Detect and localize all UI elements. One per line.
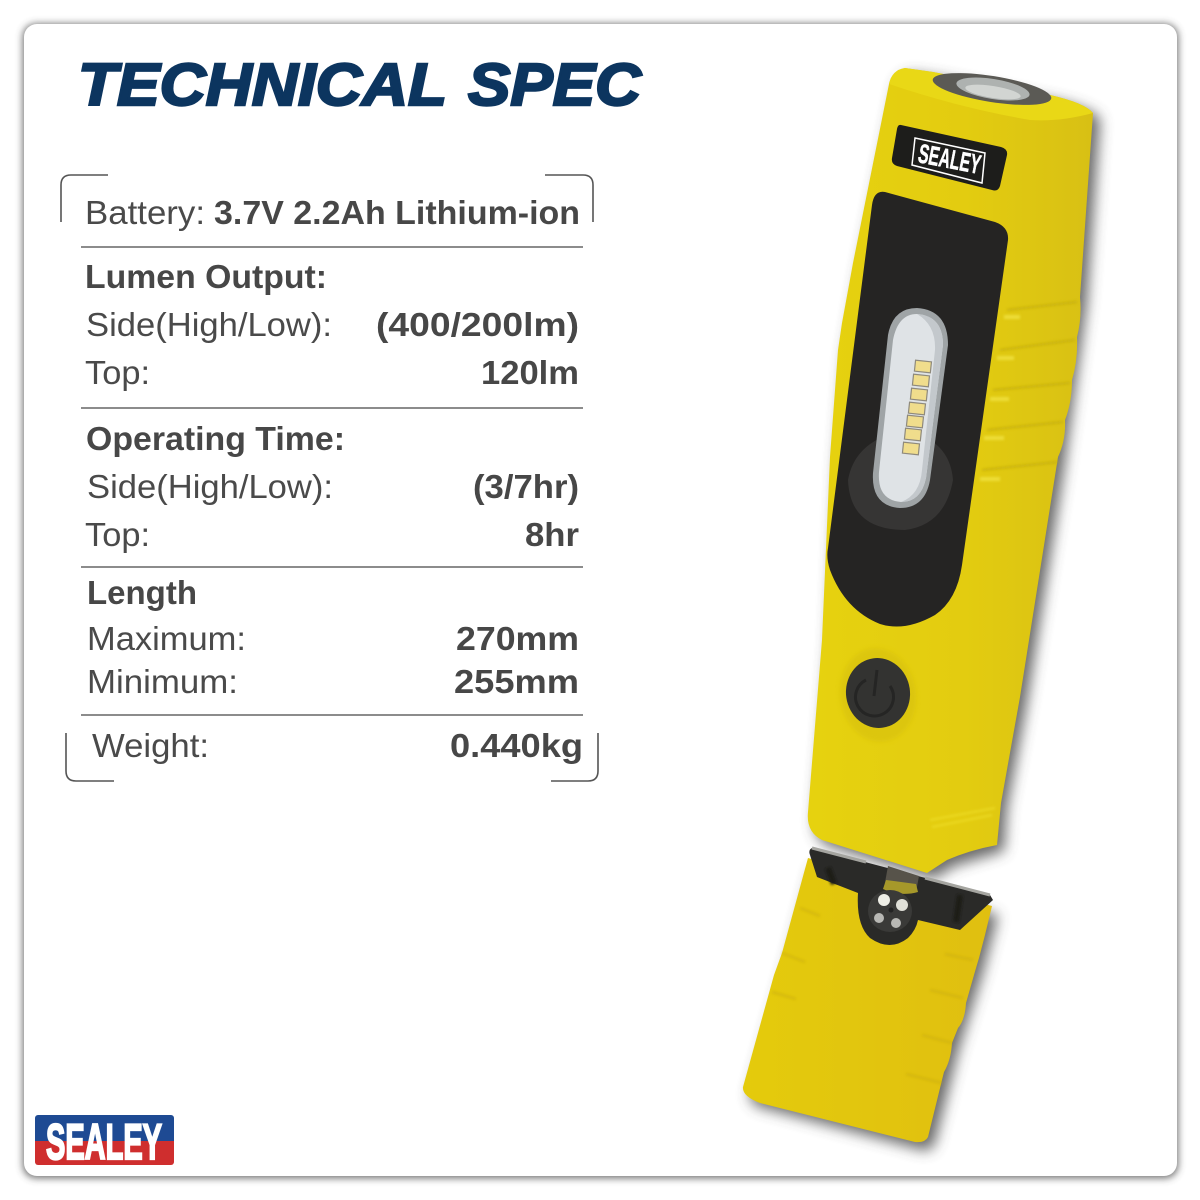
section: operating time: Operating Time: <box>86 420 345 457</box>
row: battery: 3.7V 2.2Ah Lithium-ion <box>214 194 580 231</box>
section: length: Maximum: <box>87 620 246 657</box>
bracket: bottom right <box>551 733 598 781</box>
section: lumen output: Side(High/Low): <box>86 306 332 343</box>
brand badge <box>892 125 1007 190</box>
section: length: Minimum: <box>87 663 238 700</box>
ball joint <box>868 890 912 932</box>
row: battery: Battery: <box>85 194 205 231</box>
bracket: bottom left <box>66 733 114 781</box>
section: length: Length <box>87 574 197 611</box>
top cap highlight <box>889 68 1093 120</box>
bracket: top right <box>545 175 593 222</box>
row: weight: Weight: <box>92 727 209 764</box>
section: lumen output: Lumen Output: <box>85 258 327 295</box>
section: lumen output: (400/200lm) <box>376 306 579 343</box>
section: length: 255mm <box>454 663 579 700</box>
hinge <box>809 848 993 945</box>
section: operating time: Top: <box>85 516 150 553</box>
logo: SEALEY <box>35 1115 174 1165</box>
title: TECHNICAL <box>78 52 447 118</box>
LED strip <box>902 360 931 455</box>
side rib grooves <box>982 302 1077 470</box>
section: operating time: Side(High/Low): <box>87 468 333 505</box>
product: work light <box>743 67 1100 1151</box>
section: lumen output: Top: <box>85 354 150 391</box>
section: operating time: (3/7hr) <box>473 468 579 505</box>
dark panel <box>827 192 1008 627</box>
logo: SEALEY: SEALEY <box>46 1114 162 1170</box>
top lamp <box>931 67 1053 111</box>
section: lumen output <box>85 258 579 391</box>
bracket: top left <box>61 175 108 222</box>
section: length <box>87 574 579 700</box>
lower handle <box>743 858 992 1142</box>
section: length: 270mm <box>456 620 579 657</box>
neck <box>884 866 919 892</box>
upper body <box>808 67 1093 873</box>
section: operating time <box>85 420 579 553</box>
brand badge: SEALEY <box>916 138 983 180</box>
section: lumen output: 120lm <box>481 354 579 391</box>
LED lens <box>848 308 953 530</box>
title <box>78 52 642 118</box>
spec table <box>61 175 598 781</box>
power button <box>834 643 922 747</box>
section: operating time: 8hr <box>525 516 579 553</box>
row: weight <box>92 727 583 764</box>
product shadow <box>749 74 1100 1151</box>
row: weight: 0.440kg <box>450 727 583 764</box>
title: SPEC <box>468 52 642 118</box>
